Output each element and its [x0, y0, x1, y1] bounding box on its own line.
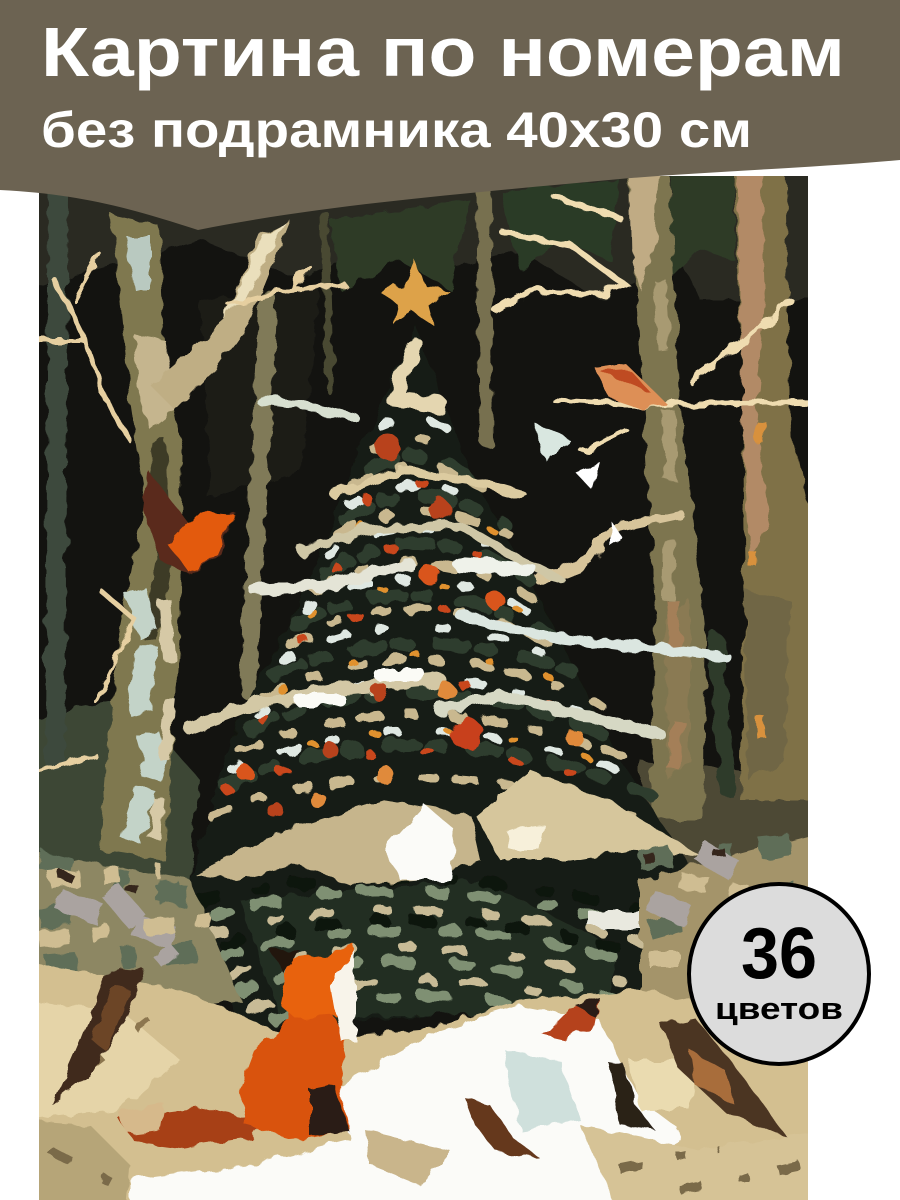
- badge: 36 colours: 36: [741, 914, 817, 994]
- bird: red left: [143, 470, 235, 575]
- forest background: [20, 160, 830, 900]
- fox: [118, 945, 355, 1148]
- star: [378, 258, 449, 325]
- right trees: [626, 176, 808, 822]
- bird: lower left: [52, 968, 145, 1105]
- title: Картина по номерам: [41, 13, 845, 91]
- header banner: [0, 0, 900, 230]
- christmas tree: [190, 325, 700, 1030]
- right twigs: [495, 197, 830, 580]
- snow mounds: [195, 770, 700, 920]
- bird: red upper right: [595, 363, 668, 408]
- snow flecks: [532, 420, 625, 548]
- bird: right large: [662, 1018, 788, 1138]
- bird: centre bottom: [465, 1098, 540, 1158]
- ornaments: [236, 434, 584, 818]
- subtitle: без подрамника 40х30 см: [41, 102, 752, 158]
- snowy ground: [20, 960, 830, 1200]
- badge: 36 colours: цветов: [715, 991, 843, 1026]
- thin far trunks: [55, 190, 728, 790]
- badge: 36 colours: [689, 884, 869, 1064]
- bird: dark small: [608, 1062, 655, 1130]
- left twigs: [40, 255, 345, 770]
- snowy tiers: [190, 345, 725, 735]
- mid ground: [39, 832, 808, 1004]
- painting: [20, 160, 830, 1200]
- left tree: [100, 215, 290, 860]
- bird: right small: [543, 998, 600, 1040]
- tree mottling: [200, 419, 660, 1025]
